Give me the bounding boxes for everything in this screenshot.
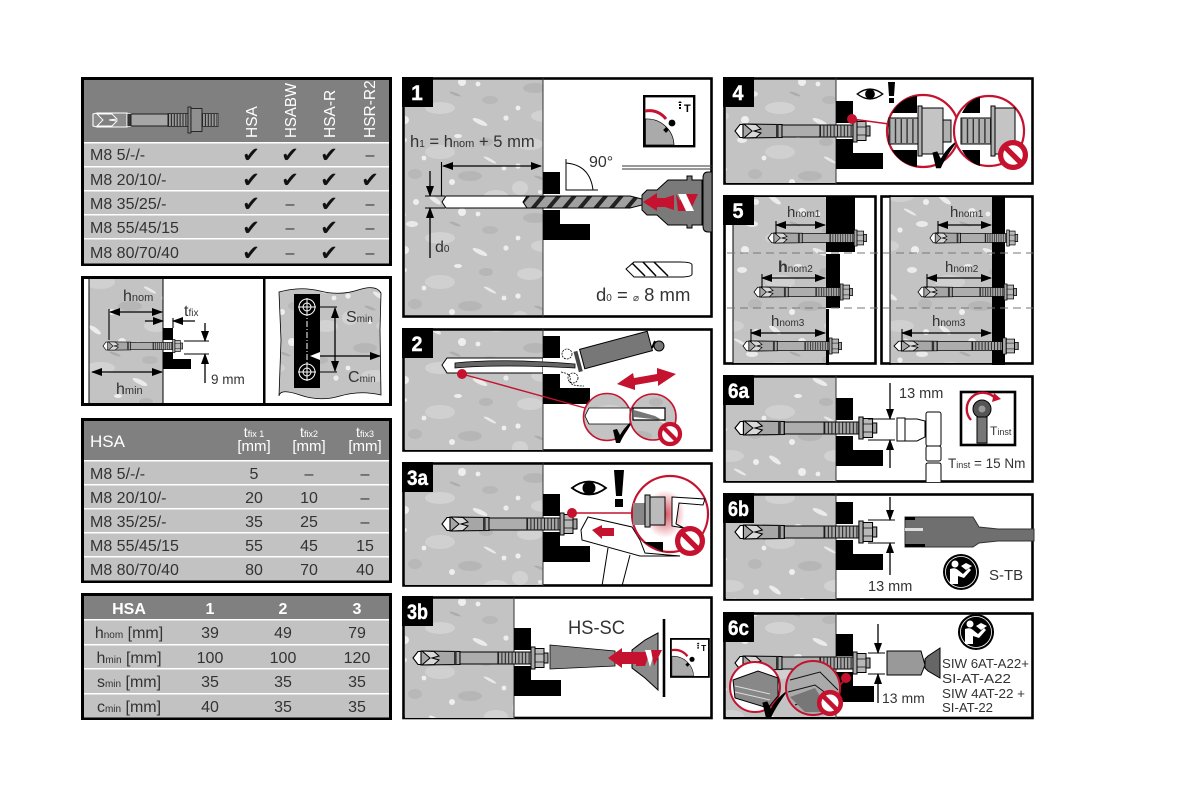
table rows: 100 <box>197 650 223 667</box>
table header: [mm] <box>237 438 271 455</box>
chuck with red rotation arrows <box>642 172 712 232</box>
spacing diagram: Cmin <box>348 369 376 386</box>
table header <box>112 601 362 618</box>
table rows: 40 <box>356 562 374 579</box>
anchor in section <box>103 339 183 353</box>
table rows: – <box>366 245 375 262</box>
step number 6c: 6c <box>728 617 749 640</box>
table rows: 35 <box>201 674 219 691</box>
dimensions right: hnom1 <box>950 204 984 221</box>
callout: red dot and leader <box>457 369 585 408</box>
icon: read manual <box>958 614 994 650</box>
table header: HSA <box>90 432 126 451</box>
machine socket tool <box>887 648 940 678</box>
callout: damaged socket prohibited <box>786 661 841 715</box>
socket wrench <box>897 412 941 482</box>
step number 6b <box>723 493 754 523</box>
panel 3a: hammer setting <box>402 462 712 587</box>
callout: clean socket ok <box>730 662 789 718</box>
step number 5: 5 <box>732 200 744 223</box>
table rows: 35 <box>274 699 292 716</box>
callout: dusty hole prohibited <box>630 394 680 444</box>
callout: correct nut position <box>887 95 959 168</box>
diameter dimension: d0 <box>435 239 450 256</box>
callout: incorrect nut position <box>954 96 1025 167</box>
dashed level lines <box>727 253 1033 308</box>
table rows: M8 20/10/- <box>90 490 166 507</box>
dimensions left <box>751 204 825 342</box>
table header: tfix2 <box>300 424 318 440</box>
step number 5 <box>723 195 754 225</box>
dimension tfix <box>145 303 198 328</box>
table rows <box>90 143 379 265</box>
dimension 13 mm: 13 mm <box>882 690 925 706</box>
table: setting parameters <box>82 594 390 718</box>
table rows: – <box>286 245 295 262</box>
dimension 13 mm: 13 mm <box>899 386 943 402</box>
column headers: HSABW <box>283 83 300 138</box>
table rows: 120 <box>344 650 370 667</box>
dimensions right <box>902 204 991 342</box>
step number 3a: 3a <box>407 467 428 490</box>
panel 2: clean hole <box>402 328 712 452</box>
tool names: SI-AT-22 <box>942 700 993 715</box>
dimension hnom <box>109 288 162 340</box>
table rows: ✔ <box>281 143 299 167</box>
step number 6a: 6a <box>728 380 749 403</box>
tool names <box>942 656 1029 715</box>
depth dimension <box>442 162 541 196</box>
dimensions left: hnom2 <box>778 259 813 276</box>
icon: torque rotary mode <box>644 96 694 146</box>
table rows: 35 <box>245 514 263 531</box>
table rows: cmin [mm] <box>97 699 161 716</box>
callout: hammer on nut prohibited <box>632 476 708 553</box>
panel 5: embedment depths <box>723 195 1033 365</box>
fixture plates left <box>826 197 855 365</box>
table rows: – <box>305 466 314 483</box>
table rows: ✔ <box>242 192 260 216</box>
table rows: 35 <box>348 699 366 716</box>
column headers <box>244 80 379 138</box>
table rows: ✔ <box>242 241 260 265</box>
callout: red dot and leader <box>836 673 851 690</box>
step number 4 <box>723 77 754 107</box>
table rows: ✔ <box>320 168 338 192</box>
column headers: HSA <box>244 105 261 138</box>
panel 6c: machine tool <box>723 612 1032 719</box>
table header <box>90 424 382 455</box>
panel: setting dimensions <box>82 277 390 405</box>
table rows: ✔ <box>242 216 260 240</box>
step number 3b <box>402 596 433 626</box>
icon: anchor bolt in table header <box>93 107 218 133</box>
table rows: 35 <box>274 674 292 691</box>
table rows: – <box>361 514 370 531</box>
dimension 9 mm <box>184 323 245 387</box>
blower pump <box>455 331 664 374</box>
table rows <box>95 625 370 716</box>
callout: clean hole ok <box>584 394 635 443</box>
anchors right <box>894 230 1018 354</box>
hole and plate <box>442 358 543 373</box>
column headers: HSR-R2 <box>362 80 379 138</box>
dimension tfix: tfix <box>184 303 198 320</box>
table rows: ✔ <box>320 216 338 240</box>
table rows: – <box>286 196 295 213</box>
table header: [mm] <box>292 438 326 455</box>
drill axis line <box>622 166 713 169</box>
callout: red dot and leader <box>847 114 889 124</box>
drilled hole <box>442 196 543 208</box>
dimension 13 mm: 13 mm <box>868 579 912 595</box>
table rows: 70 <box>300 562 318 579</box>
table rows: 39 <box>201 625 219 642</box>
table rows: ✔ <box>320 241 338 265</box>
drill diameter text: d0 = ⌀ 8 mm <box>596 284 690 305</box>
table rows: hmin [mm] <box>96 650 162 667</box>
table rows: M8 35/25/- <box>90 196 166 213</box>
fixture plate right <box>992 197 1005 365</box>
tool name S-TB: S-TB <box>989 567 1023 584</box>
step number 1: 1 <box>411 82 423 105</box>
dimension hmin <box>92 372 162 398</box>
anchor <box>735 521 877 543</box>
panel 6b: setting tool S-TB <box>723 493 1034 601</box>
table rows: M8 35/25/- <box>90 514 166 531</box>
table rows: 10 <box>300 490 318 507</box>
table rows: ✔ <box>242 143 260 167</box>
dimension 13 mm <box>868 624 925 706</box>
step number 2 <box>402 328 433 358</box>
table rows: ✔ <box>281 168 299 192</box>
table rows: – <box>366 196 375 213</box>
table header: 1 <box>206 601 215 618</box>
table rows: 20 <box>245 490 263 507</box>
anchor <box>413 647 548 669</box>
step number 6a <box>723 375 754 405</box>
torque value: Tinst = 15 Nm <box>948 456 1025 471</box>
icon: eye and exclamation <box>857 82 895 103</box>
dimension 13 mm <box>868 383 943 468</box>
table rows: M8 20/10/- <box>90 172 166 189</box>
table rows: 35 <box>348 674 366 691</box>
step number 6c <box>723 612 754 642</box>
setting tool and chuck <box>550 619 664 697</box>
diameter dimension <box>425 171 450 258</box>
icon: eye and exclamation <box>572 470 624 507</box>
table rows: ✔ <box>320 192 338 216</box>
table rows: 5 <box>250 466 259 483</box>
table rows: 15 <box>356 538 374 555</box>
icon: torque rotary mode <box>671 639 709 677</box>
step number 3a <box>402 462 433 492</box>
table rows: – <box>361 466 370 483</box>
icon: torque tightening: Tinst <box>990 424 1012 438</box>
table: anchor variants compatibility <box>82 78 390 265</box>
table rows: ✔ <box>320 143 338 167</box>
icon: drill bit <box>626 262 692 277</box>
step number 1 <box>402 77 433 107</box>
table rows: 45 <box>300 538 318 555</box>
table rows: 100 <box>270 650 296 667</box>
tool names: SIW 4AT-22 + <box>942 686 1025 701</box>
table rows: ✔ <box>242 168 260 192</box>
table rows: M8 80/70/40 <box>90 245 179 262</box>
dimension hmin: hmin <box>116 381 143 398</box>
spacing diagram <box>279 288 381 399</box>
spacing diagram: Smin <box>346 309 373 326</box>
icon: torque tightening <box>961 392 1015 445</box>
table rows: 25 <box>300 514 318 531</box>
tool names: SIW 6AT-A22+ <box>942 656 1029 671</box>
table rows: M8 55/45/15 <box>90 538 179 555</box>
panel 3b: setting tool <box>402 596 712 719</box>
formula h1: h1 = hnom + 5 mm <box>410 132 535 151</box>
table rows: M8 5/-/- <box>90 147 145 164</box>
table rows: hnom [mm] <box>95 625 163 642</box>
table rows: M8 80/70/40 <box>90 562 179 579</box>
dimension hnom: hnom <box>123 288 153 305</box>
table rows: – <box>366 147 375 164</box>
dust clouds <box>561 349 584 386</box>
table rows: – <box>361 490 370 507</box>
anchor <box>735 652 870 674</box>
table rows: 40 <box>201 699 219 716</box>
tool names: SI-AT-A22 <box>942 671 1011 686</box>
table header: tfix3 <box>356 424 374 440</box>
socket tool <box>905 517 1034 547</box>
table rows: 49 <box>274 625 292 642</box>
table rows: ✔ <box>361 168 379 192</box>
table rows: 79 <box>348 625 366 642</box>
dimensions right: hnom2 <box>945 259 979 276</box>
table rows: M8 5/-/- <box>90 466 145 483</box>
step number 3b: 3b <box>407 601 428 624</box>
panel 4: check thread and nut <box>723 77 1032 184</box>
table rows <box>90 466 374 579</box>
table header: tfix 1 <box>244 424 264 440</box>
anchor <box>442 513 577 535</box>
table header: [mm] <box>348 438 382 455</box>
table: tfix values <box>82 420 390 582</box>
red double arrow <box>617 368 676 390</box>
dimensions left: hnom1 <box>787 204 821 221</box>
fixture plate <box>163 328 191 369</box>
icon: read manual <box>943 554 979 590</box>
dimensions left: hnom3 <box>771 313 805 330</box>
step number 6b: 6b <box>728 498 749 521</box>
panel 6a: torque wrench <box>723 375 1032 483</box>
dimension 13 mm <box>868 497 912 595</box>
right angle symbol: 90° <box>589 154 613 171</box>
dimension 9 mm: 9 mm <box>211 372 245 387</box>
table rows: smin [mm] <box>97 674 161 691</box>
callout: red dot and leader <box>567 508 632 518</box>
table header: 2 <box>279 601 288 618</box>
dimensions right: hnom3 <box>932 313 966 330</box>
tool label HS-SC: HS-SC <box>568 618 625 639</box>
hammer <box>581 517 680 586</box>
table rows: – <box>366 220 375 237</box>
table rows: 80 <box>245 562 263 579</box>
table rows: – <box>286 220 295 237</box>
anchor <box>735 417 877 439</box>
table rows: M8 55/45/15 <box>90 220 179 237</box>
step number 2: 2 <box>412 333 422 356</box>
drill bit <box>523 196 642 208</box>
anchor <box>735 120 870 142</box>
panel 1: drill hole <box>402 77 713 317</box>
anchors left <box>743 230 867 354</box>
right angle symbol <box>566 154 613 190</box>
table header: 3 <box>353 601 362 618</box>
table header: HSA <box>112 601 146 618</box>
column headers: HSA-R <box>322 90 339 138</box>
step number 4: 4 <box>732 82 744 105</box>
table rows: 55 <box>245 538 263 555</box>
